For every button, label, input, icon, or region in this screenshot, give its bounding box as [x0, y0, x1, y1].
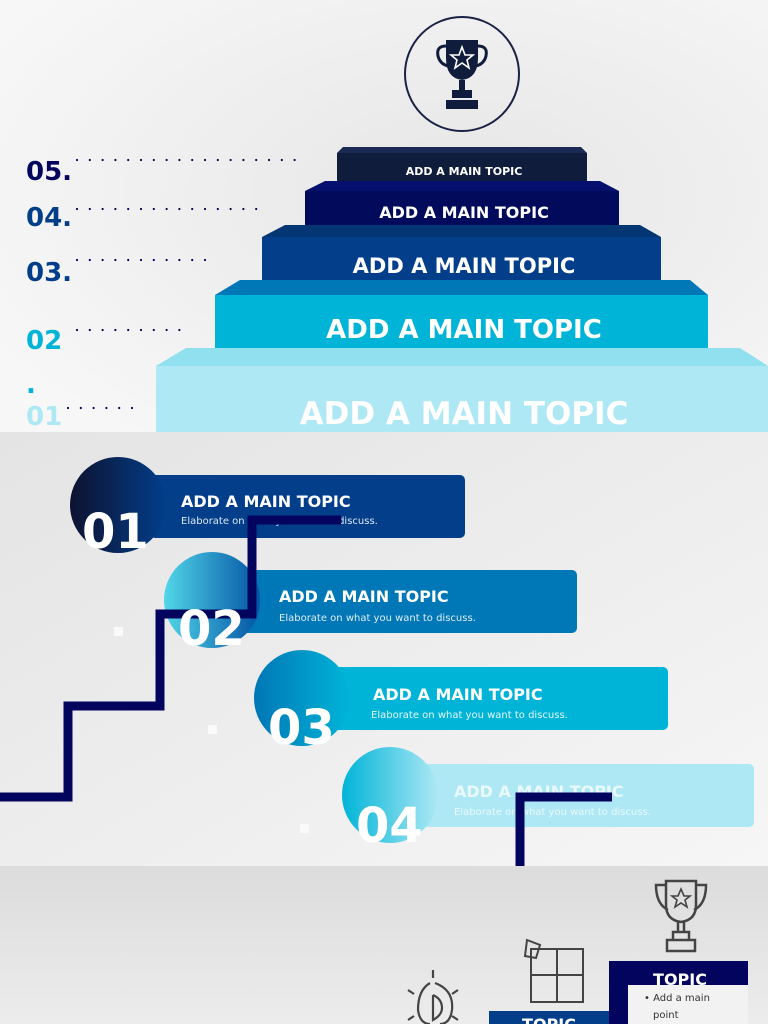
step card 03: ADD A MAIN TOPIC — [373, 685, 543, 704]
step number labels — [26, 157, 72, 432]
step card 04: 04 — [356, 798, 423, 854]
icon: lightbulb gear — [408, 970, 458, 1024]
staircase line — [0, 520, 612, 866]
step card 02 — [164, 552, 577, 648]
step card 01: 01 — [82, 504, 149, 560]
step card 03: Elaborate on what you want to discuss. — [371, 710, 568, 721]
step card 03 — [254, 650, 668, 756]
step 02 — [215, 280, 708, 348]
step card 03: 03 — [268, 700, 335, 756]
step number labels: 02 — [26, 326, 62, 356]
icon: trophy — [656, 881, 706, 951]
step card 04: Elaborate on what you want to discuss. — [454, 807, 651, 818]
step card 02: ADD A MAIN TOPIC — [279, 587, 449, 606]
step 02: ADD A MAIN TOPIC — [326, 315, 602, 345]
step 03: ADD A MAIN TOPIC — [353, 254, 575, 278]
step 01: ADD A MAIN TOPIC — [300, 396, 628, 432]
step 04 — [305, 181, 619, 226]
step number labels: 03. — [26, 258, 72, 288]
topic block 2: TOPIC — [653, 970, 707, 989]
panel: numbered steps section — [0, 432, 768, 866]
step 05 — [337, 147, 587, 182]
step number labels: . — [26, 370, 36, 400]
step 05: ADD A MAIN TOPIC — [406, 165, 522, 178]
step card 04 — [342, 747, 754, 854]
topic block 2: point — [653, 1010, 679, 1021]
step number labels: 05. — [26, 157, 72, 187]
topic block 1 — [489, 1011, 609, 1024]
topic block 2 — [609, 961, 748, 1024]
step card 01 — [70, 457, 465, 560]
topic block 2: • Add a main — [644, 993, 710, 1004]
number 02: 02 — [178, 601, 245, 657]
icon: trophy circle — [405, 17, 519, 131]
step card 01: ADD A MAIN TOPIC — [181, 492, 351, 511]
step 03 — [262, 225, 661, 281]
step number labels: 04. — [26, 203, 72, 233]
step card 04: ADD A MAIN TOPIC — [454, 782, 624, 801]
step 01 — [156, 348, 768, 432]
step card 01: Elaborate on what you want to discuss. — [181, 516, 378, 527]
step card 02: Elaborate on what you want to discuss. — [279, 613, 476, 624]
step number labels: 01 — [26, 402, 62, 432]
icon: puzzle — [525, 940, 583, 1002]
step 04: ADD A MAIN TOPIC — [379, 203, 549, 222]
panel: topic steps section — [0, 866, 768, 1024]
panel: podium section — [0, 0, 768, 432]
dotted leader lines — [68, 160, 300, 408]
